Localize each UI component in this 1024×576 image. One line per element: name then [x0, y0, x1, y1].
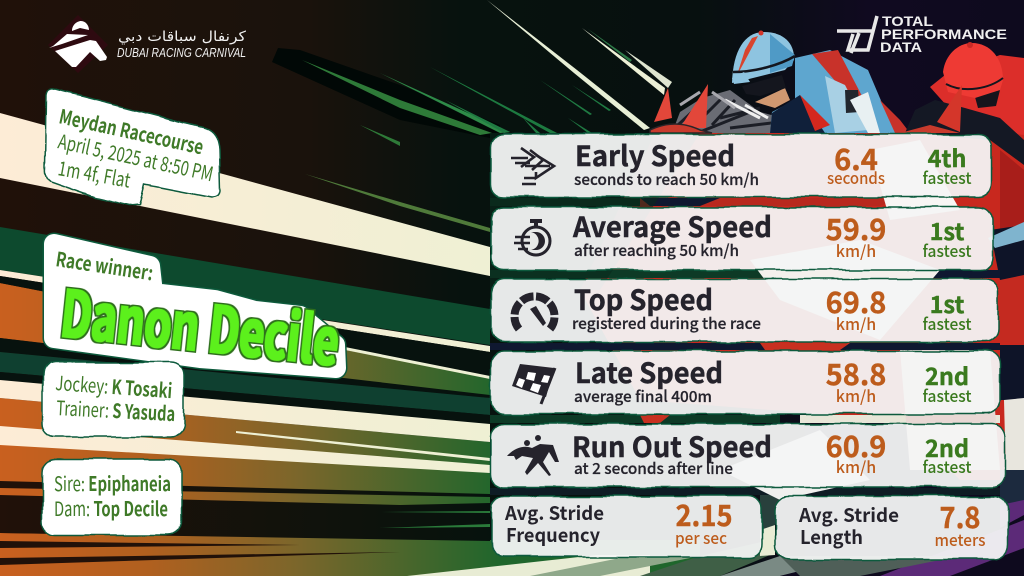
icon: TPD mark [837, 16, 877, 53]
label: Length [800, 523, 863, 550]
rank: 2nd [925, 430, 969, 464]
icon: stopwatch [514, 219, 550, 255]
date: April 5, 2025 at 8:50 PM [56, 126, 216, 187]
sire: Sire: Epiphaneia [54, 468, 171, 497]
rank: 2nd [925, 358, 969, 392]
subheading: average final 400m [574, 385, 712, 407]
panel: top speed [491, 279, 998, 342]
unit: km/h [836, 454, 876, 478]
jockey 2 and horse 2 [900, 42, 1024, 165]
logo wordmark: TOTAL [882, 13, 933, 29]
value: 69.8 [826, 280, 886, 322]
unit: km/h [836, 311, 876, 335]
logo: Total Performance Data [837, 13, 1007, 55]
jockey 1 [732, 30, 910, 133]
label: Avg. Stride [504, 499, 604, 526]
logo: Dubai Racing Carnival [48, 15, 246, 73]
logo wordmark: DATA [880, 39, 922, 55]
rank label: fastest [922, 383, 972, 407]
icon: racehorse and jockey [507, 435, 559, 476]
horse name: Danon Decile [57, 263, 344, 384]
panel: race winner [54, 243, 344, 384]
heading: Late Speed [575, 352, 723, 392]
panel: early speed [491, 134, 992, 197]
label [504, 499, 604, 548]
value: 59.9 [826, 207, 886, 249]
subheading: after reaching 50 km/h [574, 239, 739, 261]
label [798, 501, 899, 550]
panel: average stride frequency [492, 493, 762, 557]
rank: 1st [930, 213, 965, 247]
subheading: seconds to reach 50 km/h [574, 168, 759, 190]
subheading: at 2 seconds after line [574, 457, 733, 479]
rank: 4th [928, 140, 966, 174]
horse 1 mane and ears [650, 84, 795, 133]
icon: horse and jockey diamond [48, 15, 108, 73]
illustration: jockeys and horses [490, 30, 1024, 505]
label: Frequency [506, 521, 600, 548]
unit: km/h [836, 383, 876, 407]
panel: run out speed [491, 424, 1005, 487]
venue: Meydan Racecourse [57, 101, 207, 160]
icon: checkered flag [512, 364, 555, 404]
unit: per sec [675, 525, 727, 549]
rank label: fastest [922, 454, 972, 478]
trainer: Trainer: S Yasuda [56, 392, 176, 427]
unit: seconds [827, 165, 885, 189]
value: 6.4 [834, 137, 878, 179]
panel: sire and dam [42, 459, 181, 535]
rank label: fastest [922, 311, 972, 335]
logo text [117, 29, 246, 60]
rank label: fastest [922, 238, 972, 262]
icon: speedometer [514, 296, 554, 329]
logo wordmark: PERFORMANCE [881, 26, 1007, 42]
rank label: fastest [922, 165, 972, 189]
logo text: كرنفال سباقات دبي [118, 29, 246, 45]
heading: Run Out Speed [572, 426, 772, 466]
heading: Early Speed [575, 135, 735, 175]
dam: Dam: Top Decile [54, 493, 168, 522]
value: 2.15 [676, 493, 732, 535]
value: 60.9 [826, 424, 886, 466]
heading: Top Speed [574, 279, 713, 319]
unit: meters [934, 527, 986, 551]
winner label: Race winner: [54, 243, 155, 286]
logo wordmark [880, 13, 1007, 55]
unit: km/h [836, 238, 876, 262]
subheading: registered during the race [572, 312, 761, 334]
panel: jockey and trainer [43, 362, 184, 437]
panel: late speed [491, 351, 1000, 414]
heading: Average Speed [572, 206, 772, 246]
horse bodies behind panels [490, 130, 1024, 505]
distance: 1m 4f, Flat [56, 152, 133, 194]
panel: average stride length [775, 495, 1008, 559]
value: 7.8 [940, 495, 980, 537]
label: Avg. Stride [798, 501, 899, 528]
icon: speed arrows [511, 148, 554, 184]
rank: 1st [930, 286, 965, 320]
logo text: DUBAI RACING CARNIVAL [117, 46, 246, 60]
panel: average speed [491, 206, 993, 270]
panel: race info [45, 89, 220, 206]
jockey: Jockey: K Tosaki [55, 367, 173, 404]
value: 58.8 [826, 352, 886, 394]
